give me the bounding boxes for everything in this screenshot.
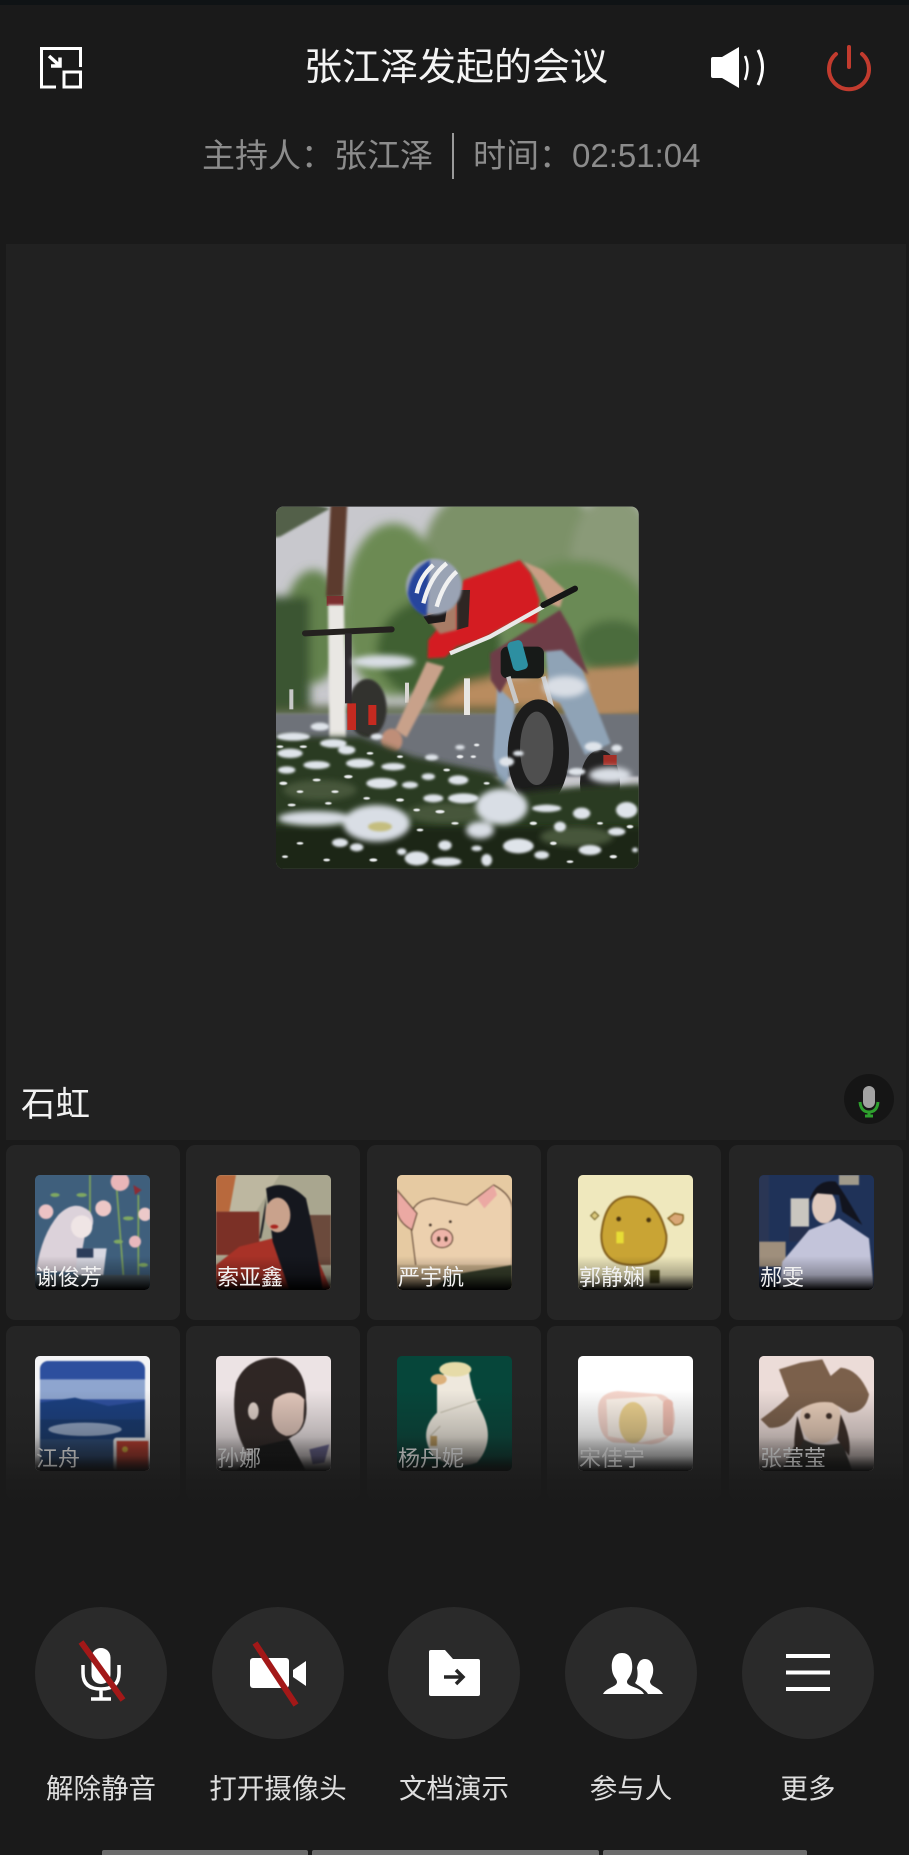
fade over lower grid xyxy=(0,1390,909,1515)
daisies xyxy=(277,723,638,866)
avatar: woman in red xyxy=(216,1175,331,1290)
avatar: pig xyxy=(397,1175,512,1290)
tile: 宋佳宁 xyxy=(547,1326,721,1501)
avatar: man in white robe xyxy=(759,1175,874,1290)
tile: 江舟 xyxy=(6,1326,180,1501)
tab segment xyxy=(312,1850,599,1855)
button: camera xyxy=(212,1607,344,1739)
name: 严宇航 xyxy=(398,1265,464,1290)
tile: 郝雯 xyxy=(729,1145,903,1320)
name: 宋佳宁 xyxy=(579,1446,645,1471)
avatar: anime girl with flowers xyxy=(35,1175,150,1290)
tile: 索亚鑫 xyxy=(186,1145,360,1320)
avatar: egg pastry xyxy=(578,1356,693,1471)
name: 孙娜 xyxy=(217,1446,261,1471)
icon: shrink window xyxy=(40,47,82,88)
name: 杨丹妮 xyxy=(398,1446,464,1471)
name: 谢俊芳 xyxy=(36,1265,102,1290)
divider xyxy=(452,133,454,179)
status band xyxy=(0,0,909,5)
avatar: potato character xyxy=(578,1175,693,1290)
tile: 张莹莹 xyxy=(729,1326,903,1501)
speaker name: 石虹 xyxy=(21,1086,90,1124)
icon: speaker xyxy=(711,47,764,88)
person xyxy=(545,643,611,755)
host name: 主持人：张江泽 xyxy=(202,137,433,174)
icon: two people xyxy=(603,1653,663,1694)
icon: active microphone badge xyxy=(844,1074,894,1124)
avatar: girl in profile xyxy=(216,1356,331,1471)
icon: menu lines xyxy=(786,1654,830,1691)
name: 张莹莹 xyxy=(760,1446,826,1471)
name: 索亚鑫 xyxy=(217,1265,283,1290)
title: 张江泽发起的会议 xyxy=(304,47,608,89)
tile: 杨丹妮 xyxy=(367,1326,541,1501)
button: participants xyxy=(565,1607,697,1739)
label: 打开摄像头 xyxy=(209,1773,347,1804)
tab segment xyxy=(102,1850,308,1855)
tile: 谢俊芳 xyxy=(6,1145,180,1320)
avatar: blue lake with flag xyxy=(35,1356,150,1471)
button: document presentation xyxy=(388,1607,520,1739)
avatar: girl in witch hat xyxy=(759,1356,874,1471)
panel: active speaker xyxy=(6,244,906,1140)
grass xyxy=(276,732,639,868)
meeting time: 时间：02:51:04 xyxy=(473,137,700,174)
icon: muted microphone xyxy=(78,1640,126,1702)
speaker photo: cyclist in daisies xyxy=(276,506,639,869)
tile: 孙娜 xyxy=(186,1326,360,1501)
tile: 郭静娴 xyxy=(547,1145,721,1320)
button: more xyxy=(742,1607,874,1739)
icon: power button xyxy=(827,45,871,92)
label: 更多 xyxy=(780,1773,836,1804)
avatar: white duck on green xyxy=(397,1356,512,1471)
icon: folder with arrow xyxy=(429,1650,480,1696)
label: 解除静音 xyxy=(46,1773,156,1804)
meeting info line xyxy=(202,133,700,179)
label: 参与人 xyxy=(590,1773,672,1804)
name: 江舟 xyxy=(36,1446,80,1471)
bike xyxy=(501,647,544,678)
label: 文档演示 xyxy=(399,1773,509,1804)
button: unmute xyxy=(35,1607,167,1739)
name: 郭静娴 xyxy=(579,1265,645,1290)
icon: camera off xyxy=(250,1642,306,1706)
participant grid xyxy=(6,1145,903,1471)
tree and parked bike xyxy=(326,503,347,597)
bottom tab strip xyxy=(102,1850,807,1855)
tile: 严宇航 xyxy=(367,1145,541,1320)
name: 郝雯 xyxy=(760,1265,804,1290)
tab segment xyxy=(603,1850,807,1855)
